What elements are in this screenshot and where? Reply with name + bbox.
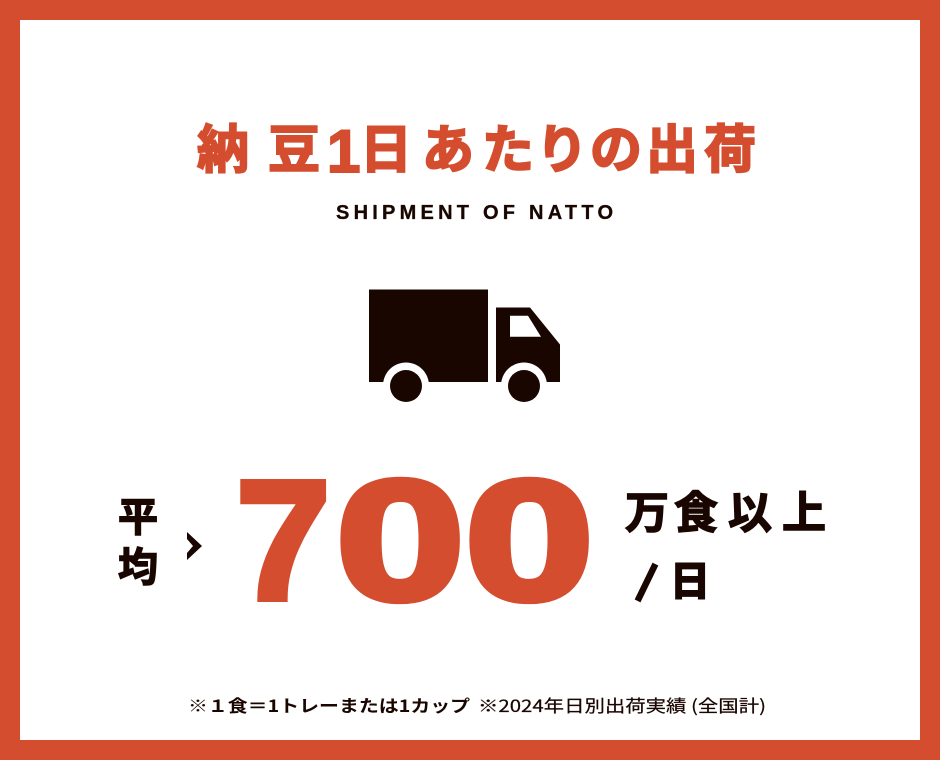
unit: 万食以上 (625, 489, 826, 538)
title: た (482, 122, 534, 180)
unit: per day (636, 560, 710, 604)
title: 荷 (704, 122, 756, 180)
title: り (536, 122, 588, 180)
big number 700: 0 (465, 446, 594, 636)
footnote: ※１食＝1トレーまたは1カップ (188, 692, 470, 717)
title: の (590, 122, 642, 180)
label: average: 均 (118, 546, 158, 590)
subtitle: SHIPMENT OF NATTO (336, 202, 613, 224)
big number 700: 0 (336, 446, 465, 636)
footnote: ※2024年日別出荷実績 (全国計) (478, 692, 766, 717)
unit: 万食以上: 万 (625, 489, 669, 538)
title: 日 (360, 122, 412, 180)
unit: 万食以上: 以 (728, 489, 772, 538)
label: average: 平 (118, 496, 158, 540)
unit: 万食以上: 食 (674, 489, 718, 538)
big number 700: 7 (236, 446, 331, 636)
label: average (118, 496, 158, 590)
unit: 万食以上: 上 (782, 489, 826, 538)
title: 豆 (268, 122, 320, 180)
unit: per day: 日 (670, 560, 710, 604)
title (197, 118, 756, 185)
title: 納 (197, 122, 249, 180)
big number 700 (236, 446, 594, 636)
icon: truck (360, 290, 570, 408)
title: 出 (646, 122, 698, 180)
footnote (188, 692, 766, 717)
title: あ (422, 122, 474, 180)
title: 1 (327, 118, 360, 185)
icon: chevron (187, 532, 202, 560)
